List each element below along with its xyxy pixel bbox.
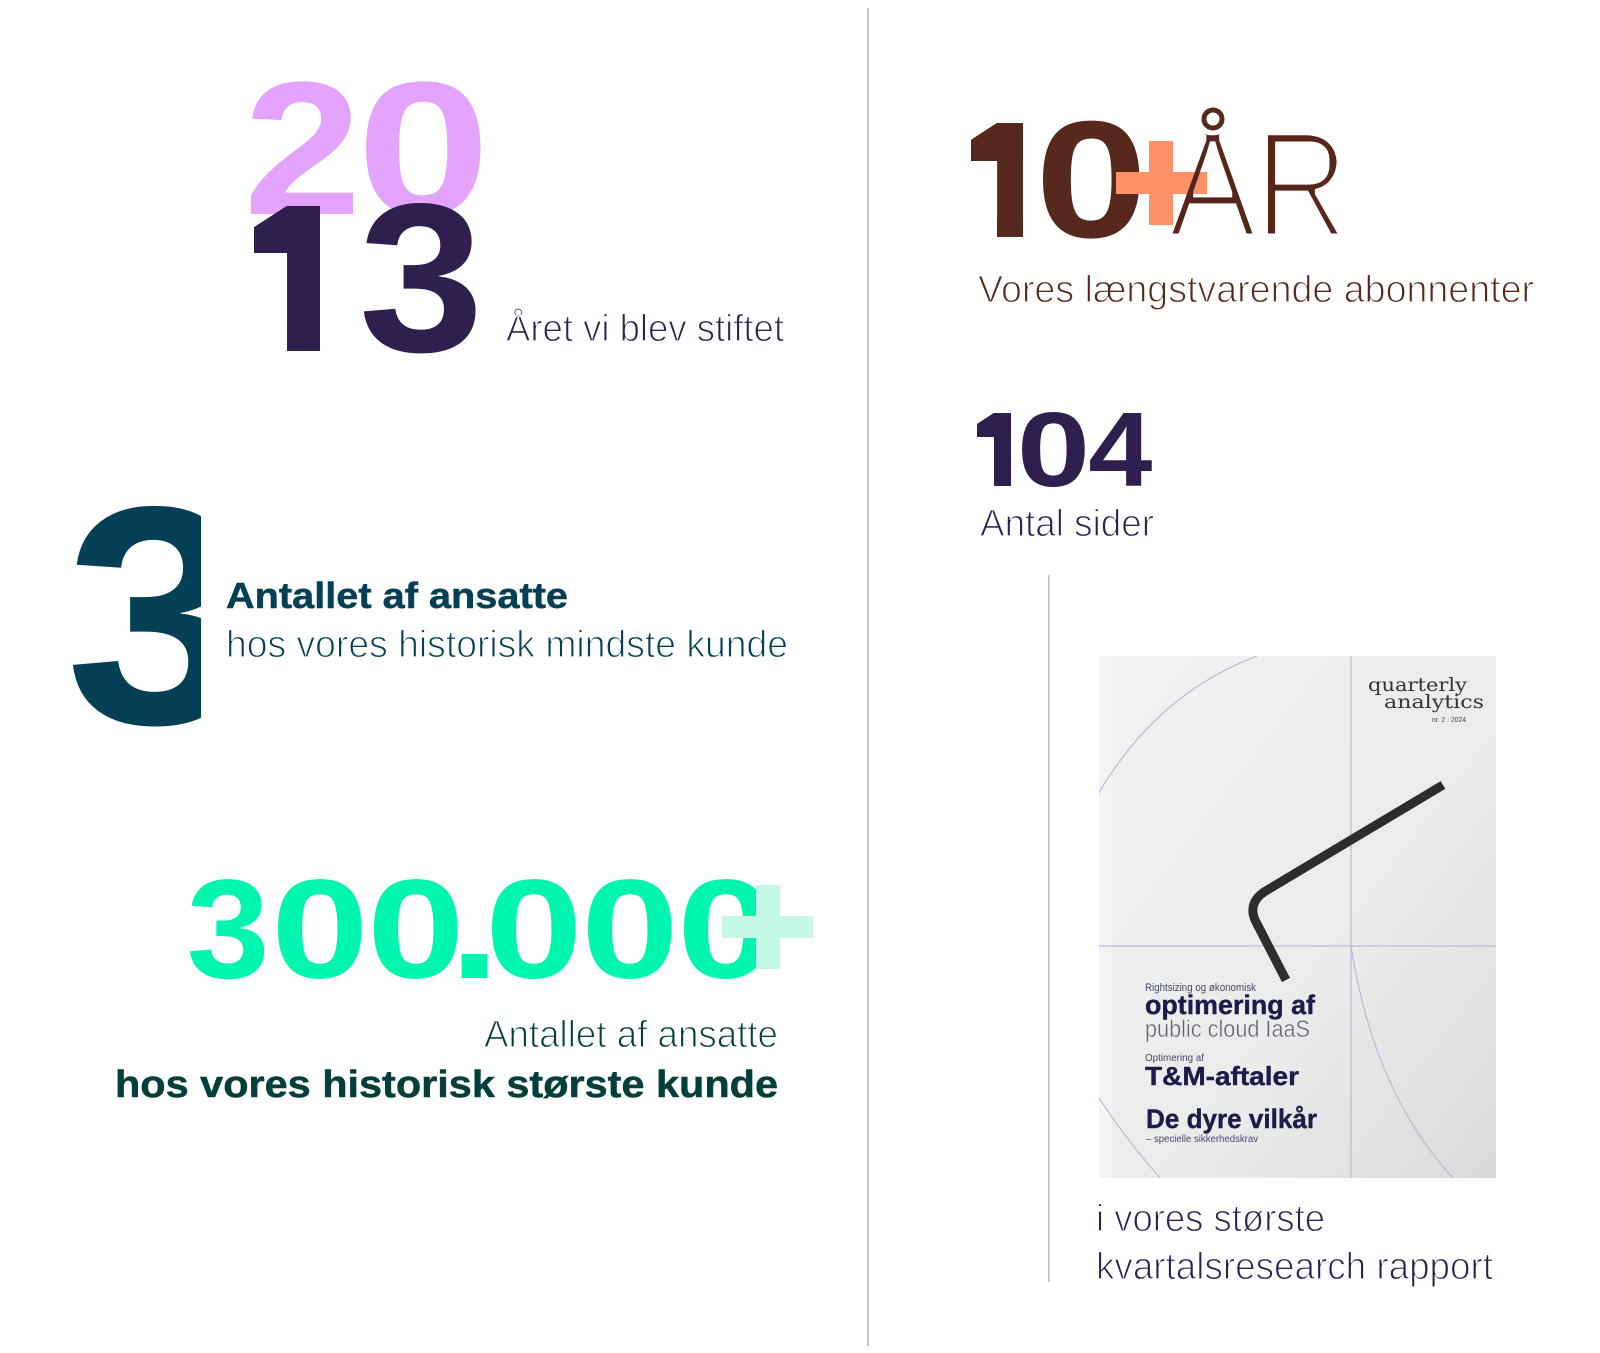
number: 300.000: 0	[581, 850, 679, 1008]
stat: page count	[977, 412, 1153, 536]
number: 3 clipped: 3	[66, 441, 246, 789]
plus sign mint	[722, 885, 813, 969]
caption bold: employees: Antallet af ansatte	[226, 575, 568, 616]
issue number: nr. 2 · 2024	[1432, 717, 1466, 724]
stat: smallest customer	[73, 506, 786, 726]
bracket line beside report	[1048, 575, 1050, 1282]
unit: years: Å	[1168, 100, 1257, 268]
caption: largest quarterly report: kvartalsresearch rapport	[1096, 1246, 1493, 1288]
caption: founding year: Året vi blev stiftet	[506, 306, 784, 350]
cover grid lines and arcs	[1097, 656, 1496, 1180]
number: 300.000: 3	[187, 850, 270, 1008]
caption: smallest customer: hos vores historisk mindste kunde	[226, 624, 788, 666]
cover headlines: T&M-aftaler	[1145, 1061, 1299, 1091]
magazine cover	[1097, 656, 1496, 1180]
number: 10: 1	[960, 88, 1052, 273]
number: 20: 0	[357, 43, 490, 255]
magazine title: analytics	[1384, 691, 1484, 713]
number: 104: 0	[1017, 391, 1090, 509]
number: 20	[244, 43, 490, 255]
caption: number of pages: Antal sider	[980, 503, 1154, 545]
number: 104: 1	[970, 391, 1029, 509]
number: 13	[254, 203, 476, 354]
plus sign orange	[1116, 141, 1207, 225]
center divider	[867, 8, 869, 1346]
icon: hex key	[1253, 785, 1443, 980]
cover headlines: De dyre vilkår	[1146, 1104, 1317, 1134]
number: 300.000: 0	[367, 850, 465, 1008]
unit: years	[1172, 108, 1338, 234]
stat: longest subscribers	[971, 108, 1533, 310]
number: 10: 0	[1035, 87, 1148, 273]
number: 13: 3	[359, 159, 484, 396]
number: 300.000: 0	[677, 850, 775, 1008]
cover headlines: optimering af	[1145, 990, 1316, 1020]
number: 13: 1	[240, 160, 357, 396]
number: 10	[971, 120, 1140, 239]
caption: employees: Antallet af ansatte	[484, 1014, 778, 1056]
number: 300.000: 0	[271, 850, 369, 1008]
number: 20: 2	[244, 43, 362, 255]
stat: largest customer	[115, 833, 813, 1106]
magazine title: quarterly	[1368, 674, 1467, 696]
stat: founding year 2013	[250, 81, 784, 354]
number: 300.000: .	[449, 833, 500, 1013]
caption: largest quarterly report	[1096, 1198, 1493, 1288]
caption bold: largest customer: hos vores historisk største kunde	[115, 1064, 778, 1106]
spine crease	[1099, 656, 1112, 1178]
number: 104	[977, 412, 1152, 487]
cover headlines: Optimering af	[1145, 1052, 1204, 1064]
cover headlines: public cloud IaaS	[1145, 1016, 1310, 1043]
cover headlines: Rightsizing og økonomisk	[1145, 982, 1256, 994]
unit: years: R	[1255, 100, 1349, 268]
caption: largest quarterly report: i vores største	[1096, 1198, 1325, 1240]
caption: longest subscribers: Vores længstvarende abonnenter	[978, 269, 1534, 311]
cover headlines: – specielle sikkerhedskrav	[1146, 1133, 1259, 1145]
number: 300.000	[187, 833, 775, 1013]
cover headlines	[1145, 982, 1317, 1145]
number: 300.000: 0	[485, 850, 583, 1008]
number: 104: 4	[1088, 391, 1152, 509]
magazine title	[1368, 674, 1484, 713]
